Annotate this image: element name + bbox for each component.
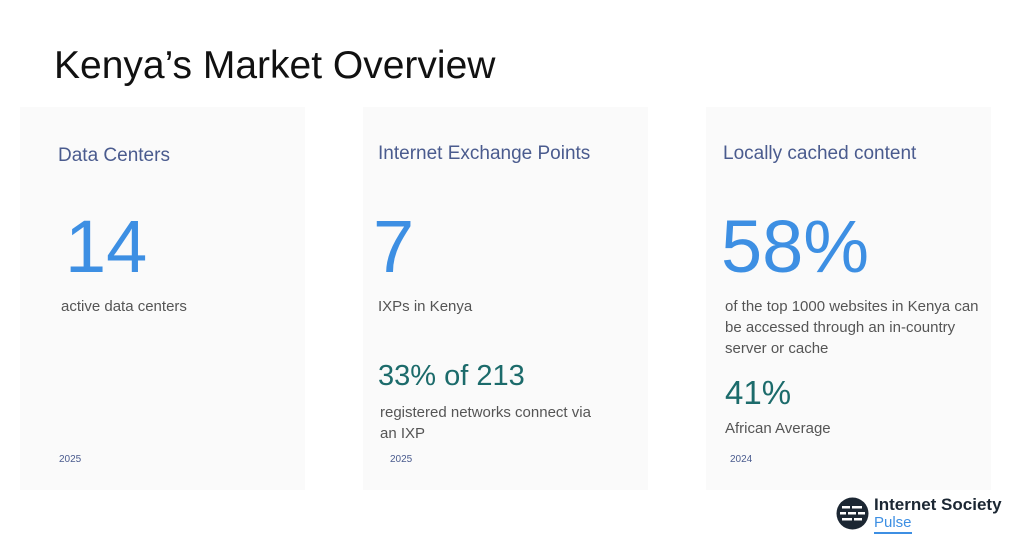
text: server or cache <box>725 340 828 357</box>
text: IXPs in Kenya <box>378 298 472 315</box>
year: 2024 <box>730 454 752 465</box>
stat 33% of 213: 33% of 213 <box>378 360 525 392</box>
text: be accessed through an in-country <box>725 319 955 336</box>
logo subtext: Pulse <box>874 514 912 531</box>
year: 2025 <box>59 454 81 465</box>
text: African Average <box>725 420 831 437</box>
logo text: Internet Society <box>874 495 1002 514</box>
big number 58%: 58% <box>721 205 869 288</box>
text <box>725 298 979 357</box>
text: registered networks connect via <box>380 404 591 421</box>
text: an IXP <box>380 425 425 442</box>
heading: Data Centers <box>58 145 170 166</box>
big number 14: 14 <box>65 205 147 288</box>
title: Kenya’s Market Overview <box>54 44 495 87</box>
text <box>380 404 591 442</box>
logo: Internet Society Pulse <box>836 495 1002 534</box>
heading: Locally cached content <box>723 143 916 164</box>
panel: cached content <box>706 107 991 490</box>
icon: globe <box>836 498 868 530</box>
year: 2025 <box>390 454 412 465</box>
text: of the top 1000 websites in Kenya can <box>725 298 979 315</box>
panel: data centers <box>20 107 305 490</box>
panel: IXPs <box>363 107 648 490</box>
text: active data centers <box>61 298 187 315</box>
heading: Internet Exchange Points <box>378 143 590 164</box>
stat 41%: 41% <box>725 374 791 411</box>
big number 7: 7 <box>373 205 414 288</box>
